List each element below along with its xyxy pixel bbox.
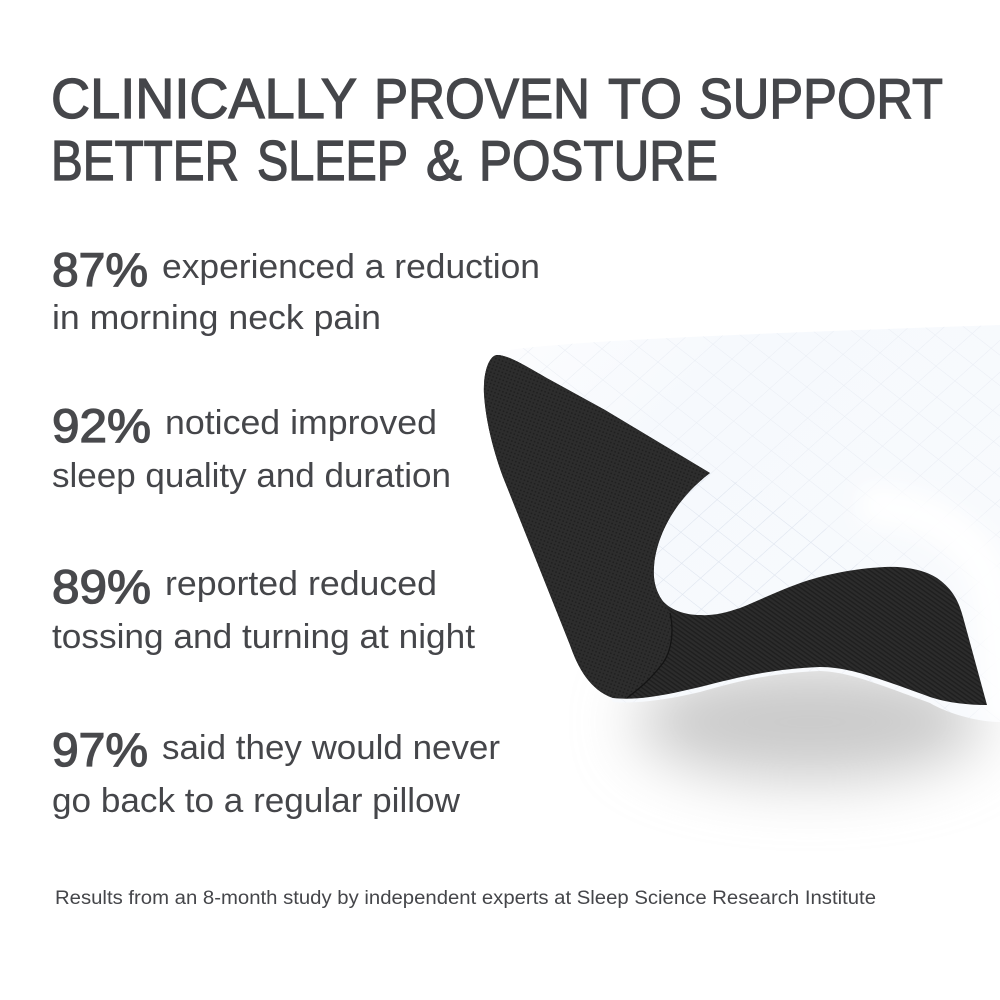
stat: 92% sleep quality: sleep quality and duration (52, 457, 451, 495)
title (51, 67, 943, 193)
footnote: Results from an 8-month study by independent experts at Sleep Science Research Institute (55, 888, 876, 909)
title: & (426, 129, 462, 193)
stat: 87% neck pain: in morning neck pain (52, 299, 381, 337)
black side panel: left (484, 355, 710, 698)
panel seam (627, 613, 672, 698)
stat: 87% neck pain: 87% (52, 243, 148, 296)
foam body (484, 325, 1000, 722)
stat: 97% never go back: said they would never (162, 729, 500, 767)
bright ridge (860, 505, 1000, 725)
black side panel: bottom (484, 355, 987, 705)
stat: 97% never go back: go back to a regular pillow (52, 782, 460, 820)
title: CLINICALLY (51, 67, 357, 131)
stat: 92% sleep quality: noticed improved (165, 404, 437, 442)
stat: 89% tossing and turning: 89% (52, 560, 151, 613)
quilted texture (517, 326, 1000, 718)
title: TO (608, 67, 682, 131)
stat: 87% neck pain: experienced a reduction (162, 248, 540, 286)
title: POSTURE (479, 129, 718, 193)
stat: 97% never go back (52, 723, 500, 820)
stat: 87% neck pain (52, 243, 540, 337)
pillow shadow (635, 664, 985, 780)
title: SUPPORT (699, 67, 943, 131)
stat: 97% never go back: 97% (52, 723, 148, 776)
quilted pocket texture (654, 473, 860, 615)
stat: 92% sleep quality (52, 399, 451, 495)
stat: 89% tossing and turning: reported reduced (165, 565, 437, 603)
pillow illustration (480, 320, 1000, 780)
stat: 92% sleep quality: 92% (52, 399, 151, 452)
stat: 89% tossing and turning: tossing and turning at night (52, 618, 476, 656)
title: PROVEN (374, 67, 590, 131)
title: BETTER (51, 129, 239, 193)
stat: 89% tossing and turning (52, 560, 476, 656)
title: SLEEP (257, 129, 408, 193)
